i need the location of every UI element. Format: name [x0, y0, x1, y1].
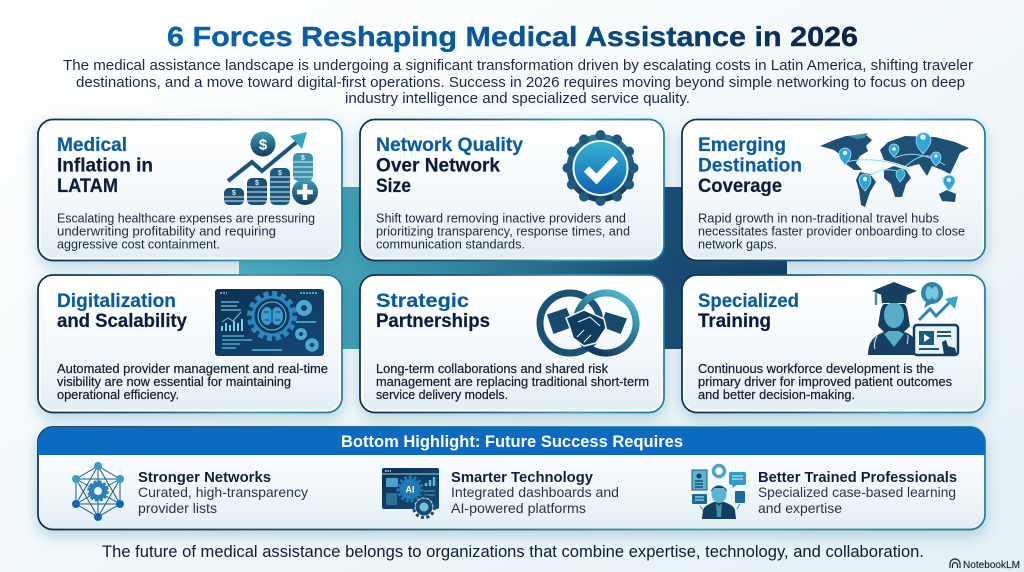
body text: Escalating healthcare expenses are pressuring — [57, 212, 315, 226]
icon: coins and rising arrow: $ — [255, 180, 259, 187]
heading: Training — [698, 310, 771, 332]
heading: Digitalization — [57, 290, 176, 312]
icon: coins and rising arrow: $ — [301, 155, 305, 162]
body text: and better decision-making. — [698, 388, 855, 402]
heading: Medical — [57, 134, 127, 156]
body text: network gaps. — [698, 238, 777, 252]
item: Smarter Technology — [382, 468, 619, 518]
item: Stronger Networks: Curated, high-transparency — [138, 485, 308, 500]
body text — [57, 362, 328, 402]
body text: Rapid growth in non-traditional travel hubs — [698, 212, 939, 226]
icon: AI platform window — [382, 468, 439, 518]
heading — [376, 290, 490, 332]
body text — [376, 362, 649, 402]
body text: management are replacing traditional short-term — [376, 375, 649, 389]
icon: quality badge with check — [562, 130, 638, 206]
body text: aggressive cost containment. — [57, 238, 220, 252]
heading — [698, 290, 799, 332]
heading — [698, 134, 802, 197]
heading: Strategic — [376, 290, 469, 312]
panel: Strategic Partnerships — [360, 275, 664, 412]
item: Better Trained Professionals: Better Trained Professionals — [758, 470, 957, 486]
body text: Shift toward removing inactive providers and — [376, 212, 626, 226]
body text — [57, 212, 315, 252]
item: Smarter Technology: Smarter Technology — [451, 470, 593, 486]
body text: underwriting profitability and requiring — [57, 224, 276, 238]
body text: necessitates faster provider onboarding to close — [698, 224, 965, 238]
icon: professional with info bubbles — [692, 466, 746, 519]
icon: dashboard with brain gear — [215, 289, 324, 356]
panel: Bottom Highlight — [38, 427, 985, 530]
body text: primary driver for improved patient outcomes — [698, 375, 952, 389]
intro paragraph: The medical assistance landscape is undergoing a significant transformation driven by escalating costs in Latin America, shifting traveler — [63, 57, 973, 74]
icon: AI platform window: AI — [406, 484, 414, 494]
item: Better Trained Professionals — [692, 466, 957, 519]
heading: and Scalability — [57, 310, 187, 332]
intro paragraph: industry intelligence and specialized service quality. — [345, 90, 690, 107]
closing statement: The future of medical assistance belongs to organizations that combine expertise, technology, and collaboration. — [102, 543, 924, 561]
icon: coins and rising arrow — [224, 132, 318, 205]
body text: communication standards. — [376, 238, 525, 252]
body text — [698, 362, 952, 402]
body text — [376, 212, 630, 252]
heading: Partnerships — [376, 310, 490, 332]
heading: Network Quality — [376, 134, 523, 156]
item: Better Trained Professionals: Specialized case-based learning — [758, 485, 956, 500]
panel: Emerging Destination Coverage — [682, 120, 985, 260]
item: Stronger Networks — [72, 462, 308, 521]
icon: trainee with cap, brain and tablet — [868, 282, 958, 355]
body text: service delivery models. — [376, 388, 508, 402]
item: Better Trained Professionals: and expertise — [758, 501, 842, 516]
heading: Emerging — [698, 134, 786, 156]
body text: visibility are now essential for maintaining — [57, 375, 291, 389]
body text — [698, 212, 965, 252]
heading: Over Network — [376, 154, 500, 176]
icon: coins and rising arrow: $ — [278, 170, 282, 177]
intro paragraph: destinations, and a move toward digital-first operations. Success in 2026 requires moving beyond simple networking to focus on deep — [76, 74, 965, 91]
item: Stronger Networks: provider lists — [138, 501, 217, 516]
heading — [57, 290, 187, 332]
body text: operational efficiency. — [57, 388, 179, 402]
panel: Digitalization and Scalability — [38, 275, 342, 412]
title: 6 Forces Reshaping Medical Assistance in 2026 — [167, 21, 858, 52]
body text: Automated provider management and real-time — [57, 362, 328, 376]
body text: Continuous workforce development is the — [698, 362, 934, 376]
item: Smarter Technology: AI-powered platforms — [451, 501, 586, 516]
item: Stronger Networks: Stronger Networks — [138, 470, 271, 486]
item: Smarter Technology: Integrated dashboards and — [451, 485, 619, 500]
icon: coins and rising arrow: $ — [232, 190, 236, 197]
NotebookLM logo: NotebookLM — [963, 559, 1020, 571]
heading: Specialized — [698, 290, 799, 312]
icon: handshake in linked rings — [540, 282, 647, 364]
body text: prioritizing transparency, response times, and — [376, 224, 630, 238]
heading: Coverage — [698, 175, 782, 197]
panel: Specialized Training — [682, 275, 985, 412]
heading: Destination — [698, 154, 802, 176]
body text: Long-term collaborations and shared risk — [376, 362, 609, 376]
heading — [57, 134, 153, 197]
panel: Network Quality Over Network Size — [360, 120, 664, 260]
heading — [376, 134, 523, 197]
panel: Medical Inflation in LATAM — [38, 120, 342, 260]
heading: LATAM — [57, 175, 118, 197]
intro paragraph — [63, 57, 973, 107]
header bar — [38, 427, 985, 455]
icon: network hexagon — [72, 462, 124, 521]
heading: Size — [376, 175, 411, 197]
heading: Inflation in — [57, 154, 153, 176]
icon: world map with pins — [820, 133, 969, 207]
header bar: Bottom Highlight: Future Success Requires — [341, 433, 683, 451]
icon: coins and rising arrow: $ — [259, 136, 268, 154]
